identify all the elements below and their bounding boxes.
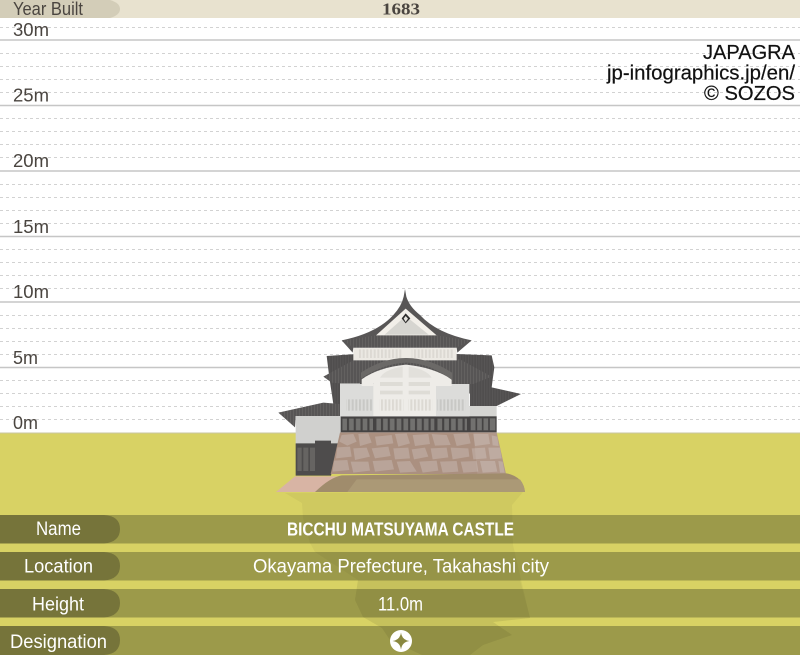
top roof [342,289,472,353]
scale labels: 25m [13,86,49,106]
scale labels [13,20,49,433]
credit: jp-infographics.jp/en/ [606,62,795,84]
stone wall [331,432,506,474]
lattice band [341,416,497,432]
mound and path [276,473,525,492]
left lower wall [296,416,341,444]
info row labels: Name [36,519,81,540]
right lower wall [469,406,497,417]
info row values [253,520,549,616]
scale labels: 5m [13,348,38,368]
credit [606,42,796,105]
main wall [340,383,469,416]
credit: © SOZOS [704,83,795,105]
info row values: 11.0m [378,594,423,616]
icon: designation badge [390,630,412,652]
year built bar: 1683 [382,0,420,18]
left lower roof [278,403,340,427]
gable [376,309,437,335]
info row values: BICCHU MATSUYAMA CASTLE [287,520,514,540]
scale labels: 10m [13,282,49,302]
info row labels [10,519,107,653]
central gable wall [373,380,436,416]
year built bar [0,0,800,19]
ground [0,433,800,655]
castle reflection shadow [285,492,530,655]
gate [296,441,338,476]
top floor [353,348,457,360]
info row labels: Location [24,556,93,578]
credit: JAPAGRA [703,42,796,64]
arch panel [380,367,432,378]
scale labels: 20m [13,151,49,171]
height scale grid [0,28,800,420]
castle illustration [276,289,525,492]
back roof [327,354,521,406]
scale labels: 0m [13,413,38,433]
middle roof [323,359,492,384]
scale labels: 30m [13,20,49,40]
info row labels: Designation [10,632,107,653]
info rows [0,515,800,655]
info row values: Okayama Prefecture, Takahashi city [253,556,549,578]
info row labels: Height [32,594,85,616]
scale labels: 15m [13,217,49,237]
